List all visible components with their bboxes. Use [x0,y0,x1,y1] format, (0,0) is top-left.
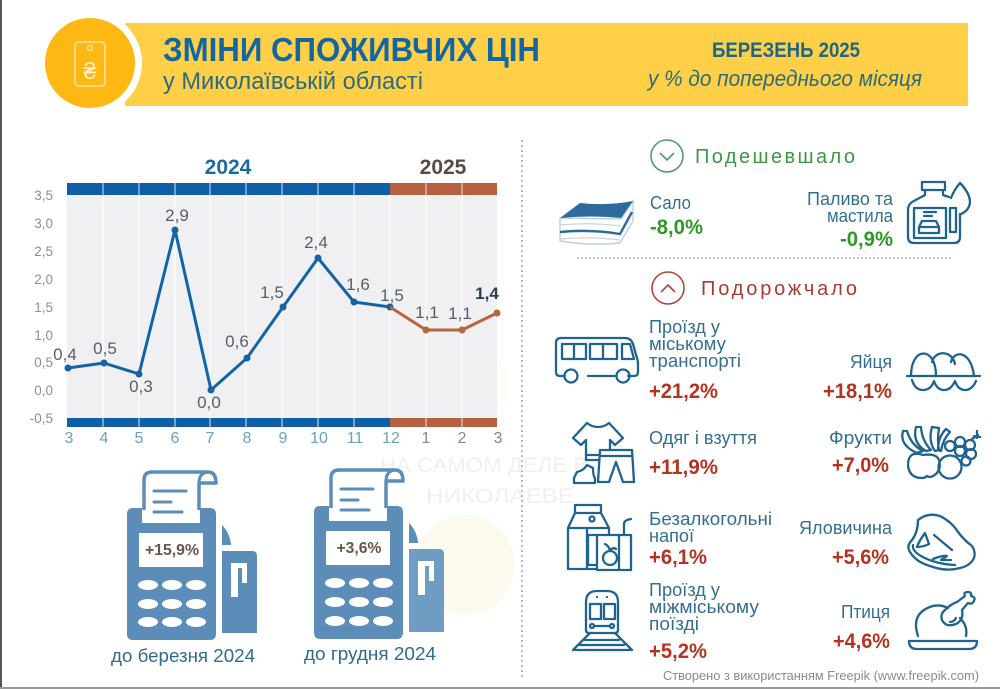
subtitle: у Миколаївській області [163,68,423,95]
icon: bus [556,338,638,382]
panel: more expensive [556,272,980,683]
y axis [30,188,53,426]
y axis: 0,0 [34,383,53,398]
item: city transport: +21,2% [649,379,718,403]
data labels [53,206,499,412]
terminal: to March 2024 [111,472,257,666]
x axis: 1 [422,430,431,447]
item: clothing: +11,9% [649,455,718,479]
year 2025 label: 2025 [420,156,467,179]
item: fruit [829,427,892,477]
data labels: 0,6 [225,332,249,351]
period: БЕРЕЗЕНЬ 2025 [712,39,860,62]
x axis: 5 [135,430,144,447]
x axis: 11 [347,430,363,447]
screen [139,533,203,567]
x axis: 4 [100,430,109,447]
data labels: 1,1 [448,304,472,323]
item: poultry: +4,6% [833,629,890,653]
x axis: 6 [171,430,180,447]
top band [67,183,497,195]
y axis: 1,0 [34,328,53,343]
line 2024 [64,226,394,394]
item: intercity train: міжміському [649,596,760,617]
x axis [65,430,503,447]
item: beef: Яловичина [799,517,893,538]
item: soft drinks: напої [649,525,694,546]
watermark [380,355,588,615]
x axis: 3 [494,430,503,447]
x axis: 7 [206,430,215,447]
data labels: 0,4 [53,345,77,364]
item: eggs [823,351,892,403]
item: soft drinks: Безалкогольні [649,508,772,529]
item: clothing: Одяг і взуття [649,427,757,448]
heading: more expensive [652,272,857,304]
icon: price tag with hryvnia [38,11,142,115]
item: soft drinks: +6,1% [649,545,707,569]
icon: beef [908,515,975,570]
icon: fruit [902,427,980,478]
keypad [325,578,393,626]
item: fuel [807,188,894,251]
icon: card [409,523,444,632]
data labels: 1,4 [475,284,499,303]
item: beef [799,517,893,569]
value: +3,6% [336,540,382,557]
item: poultry [833,601,890,653]
item: lard: -8,0% [650,215,703,239]
item: city transport: міському [649,333,727,354]
y axis: 2,0 [34,272,53,287]
y axis: -0,5 [30,411,53,426]
data labels: 0,3 [129,377,153,396]
item: lard: Сало [650,192,691,213]
y axis: 3,0 [34,216,53,231]
item: beef: +5,6% [832,545,889,569]
item: clothing [649,427,757,479]
item: fruit: Фрукти [829,427,892,448]
period note: у % до попереднього місяця [646,66,922,91]
footer credit: Створено з використанням Freepik (www.freepik.com) [663,668,979,683]
data labels: 1,6 [346,275,370,294]
item: soft drinks [649,508,772,569]
icon: receipt [144,472,216,512]
keypad [138,580,206,627]
icon: price tag with hryvnia: ₴ [84,58,97,84]
data labels: 2,4 [304,233,328,252]
data labels: 0,0 [197,393,221,412]
y axis: 3,5 [34,188,53,203]
watermark: НА САМОМ ДЕЛЕ В [380,454,588,477]
item: city transport: Проїзд у [649,316,721,337]
item: fruit: +7,0% [832,453,889,477]
year 2024 label: 2024 [205,156,252,179]
x axis: 3 [65,430,74,447]
item: intercity train: +5,2% [649,639,707,663]
header banner [38,11,968,115]
data labels: 0,5 [93,339,117,358]
icon: drinks [568,505,631,570]
x axis: 10 [310,430,328,447]
data labels: 1,5 [380,286,404,305]
y axis: 2,5 [34,244,53,259]
value: +15,9% [145,542,199,559]
terminal body [127,508,216,640]
icon: chicken [909,592,977,649]
item: intercity train [649,579,760,663]
data labels: 1,1 [415,303,439,322]
icon: clothes [573,423,634,483]
icon: card [222,525,257,633]
x axis: 8 [243,430,252,447]
x axis: 9 [279,430,288,447]
item: eggs: +18,1% [823,379,892,403]
heading: cheaper [651,140,855,172]
item: eggs: Яйця [850,351,892,372]
line 2025 [390,307,500,334]
x axis: 2 [458,430,467,447]
icon: fuel canister [908,182,970,243]
item: city transport [649,316,741,403]
data labels: 2,9 [165,206,189,225]
icon: lard [560,201,633,244]
item: city transport: транспорті [649,350,741,371]
data labels: 1,5 [260,283,284,302]
panel: cheaper [560,140,970,251]
item: intercity train: Проїзд у [649,579,721,600]
line chart [30,156,503,447]
screen [326,531,390,565]
item: poultry: Птиця [841,601,890,622]
y axis: 1,5 [34,300,53,315]
icon: eggs [907,353,980,390]
watermark: НИКОЛАЕВЕ [426,485,574,508]
caption: до березня 2024 [111,645,255,666]
caption: до грудня 2024 [304,643,436,664]
item: lard [650,192,703,239]
bottom band [67,418,497,427]
item: fuel: Паливо та [807,188,894,209]
heading: more expensive: Подорожчало [701,278,857,300]
terminal body [314,506,403,639]
icon: receipt [331,470,403,510]
y axis: 0,5 [34,355,53,370]
heading: cheaper: Подешевшало [695,146,855,168]
title: ЗМІНИ СПОЖИВЧИХ ЦІН [163,31,540,68]
x axis: 12 [382,430,400,447]
terminal: to December 2024 [304,470,444,664]
item: fuel: -0,9% [840,227,893,251]
item: intercity train: поїзді [649,613,699,634]
icon: train [573,591,632,650]
item: fuel: мастила [827,205,894,226]
